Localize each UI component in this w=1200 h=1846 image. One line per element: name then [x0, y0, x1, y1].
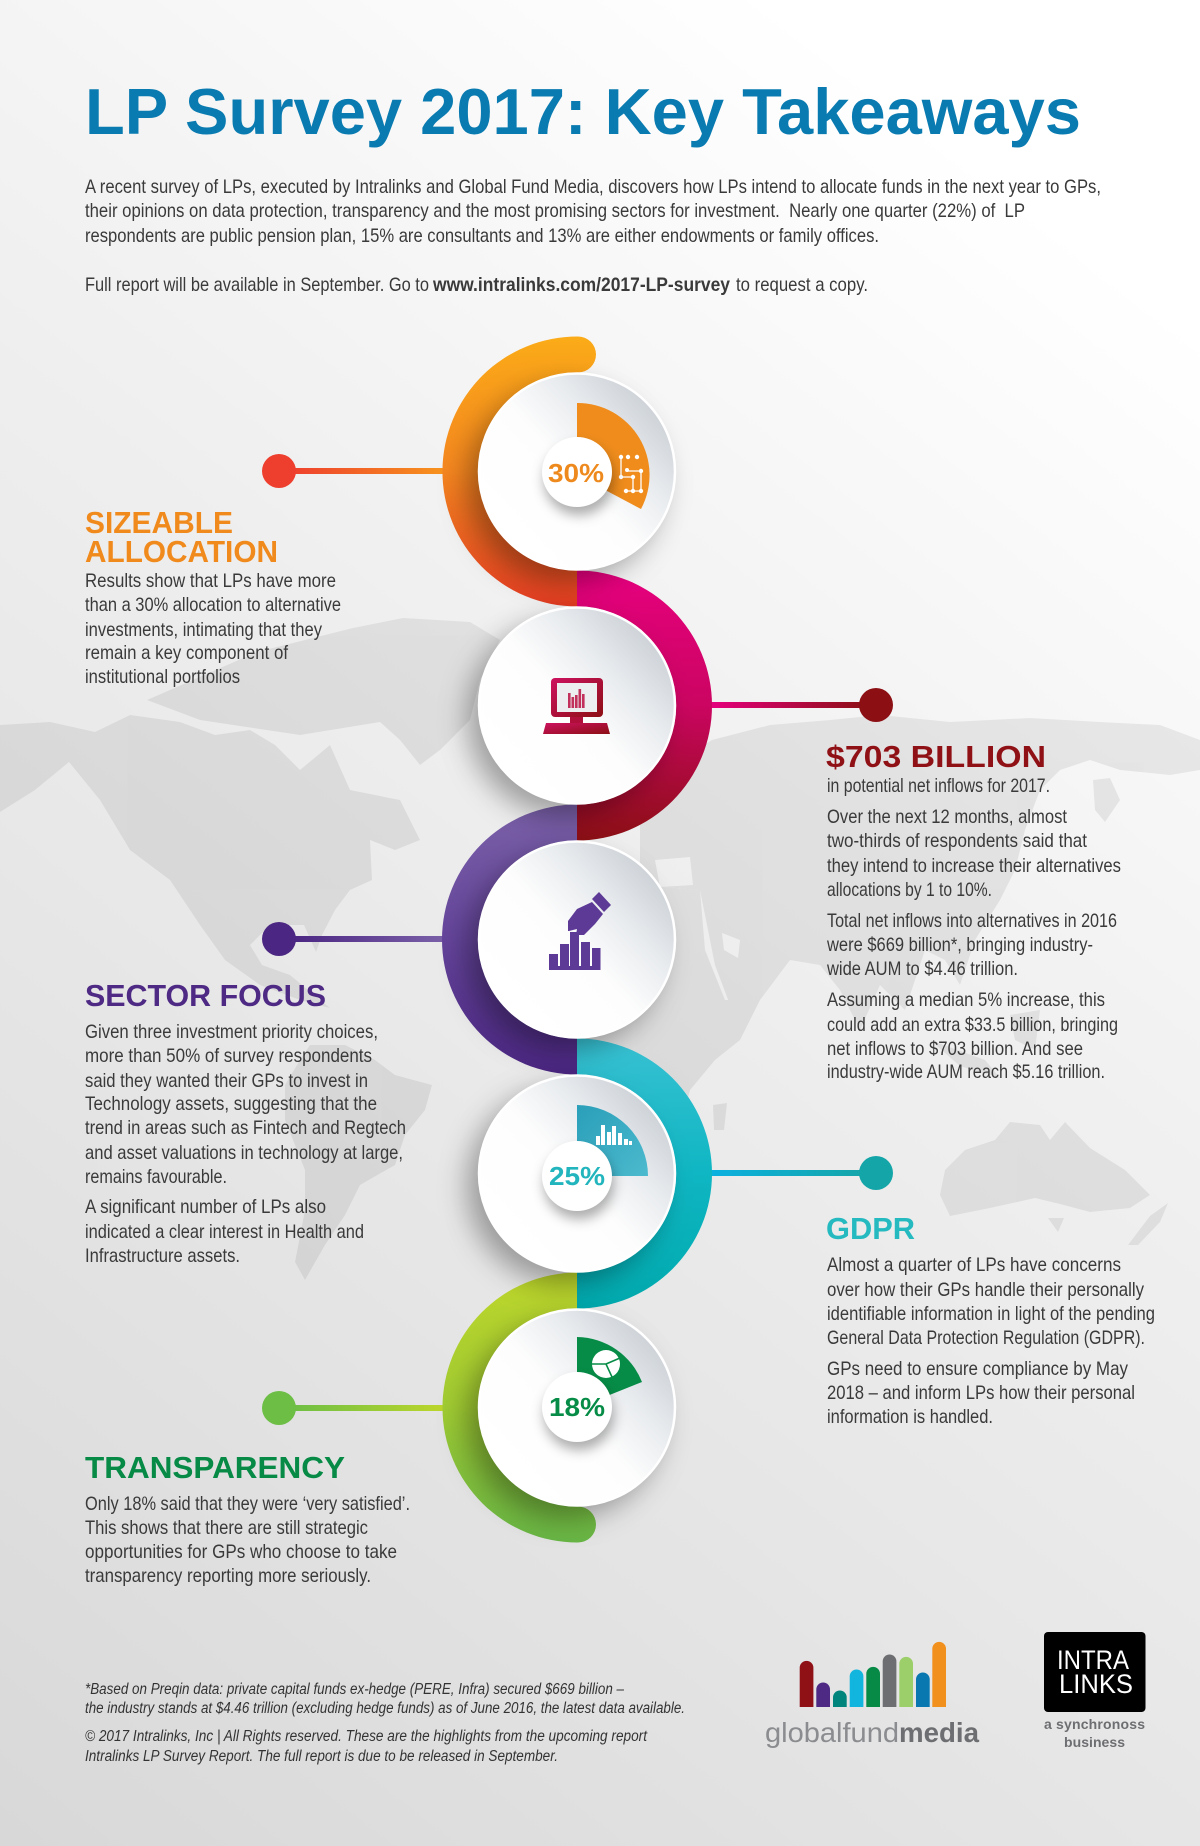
logo: intralinks: a synchronoss: [1044, 1716, 1145, 1732]
text block: gdpr: Almost a quarter of LPs have concerns: [827, 1254, 1121, 1276]
disc 5: 18%: [467, 1310, 675, 1518]
intro text: www.intralinks.com/2017-LP-survey: [432, 274, 730, 296]
icon: bar chart: [596, 1125, 632, 1145]
sector: teal 25%: [577, 1105, 648, 1176]
text block: sector focus: SECTOR FOCUS: [85, 978, 326, 1013]
world map background: [0, 618, 1200, 1280]
text block: sizeable allocation: than a 30% allocation to alternative: [85, 594, 341, 616]
icon: pie chart: [592, 1350, 620, 1378]
text block: sector focus: Technology assets, suggesting that the: [85, 1093, 377, 1115]
footnote: *Based on Preqin data: private capital funds ex-hedge (PERE, Infra) secured $669 billion –: [85, 1681, 624, 1698]
text block: 703 billion: Assuming a median 5% increase, this: [827, 989, 1105, 1011]
text block: 703 billion: [826, 739, 1121, 1083]
logo: intralinks: business: [1064, 1734, 1125, 1750]
intro text: to request a copy.: [736, 274, 868, 296]
text block: gdpr: [826, 1211, 1155, 1428]
value: 25%: 25%: [549, 1161, 605, 1191]
text block: gdpr: GPs need to ensure compliance by May: [827, 1358, 1128, 1380]
connector: sector focus: [262, 922, 444, 956]
text block: transparency: [85, 1450, 410, 1587]
text block: 703 billion: could add an extra $33.5 billion, bringing: [827, 1014, 1118, 1036]
logo: globalfundmedia: globalfund: [765, 1717, 899, 1748]
logo: intralinks: INTRA: [1057, 1645, 1129, 1675]
text block: 703 billion: they intend to increase their alternatives: [827, 855, 1121, 877]
disc 2: monitor: [467, 608, 675, 816]
footnote: the industry stands at $4.46 trillion (excluding hedge funds) as of June 2016, the latest data available.: [85, 1700, 685, 1717]
text block: sector focus: Infrastructure assets.: [85, 1245, 240, 1267]
text block: sector focus: indicated a clear interest in Health and: [85, 1221, 364, 1243]
ring: teal: [577, 1038, 712, 1308]
text block: 703 billion: net inflows to $703 billion. And see: [827, 1038, 1083, 1060]
value: 30%: 30%: [548, 458, 604, 488]
text block: gdpr: information is handled.: [827, 1406, 993, 1428]
logo: intralinks: LINKS: [1059, 1669, 1133, 1699]
icon: monitor: [543, 678, 610, 734]
intro text: their opinions on data protection, transparency and the most promising sectors for investment. Nearly one quarter (22%) of LP: [85, 200, 1025, 222]
text block: sizeable allocation: remain a key component of: [85, 642, 288, 664]
logo: globalfundmedia: [765, 1642, 979, 1748]
ring: purple: [442, 804, 577, 1074]
text block: sector focus: [85, 978, 406, 1267]
footnote: [85, 1681, 685, 1765]
text block: transparency: Only 18% said that they were ‘very satisfied’.: [85, 1493, 410, 1515]
text block: gdpr: over how their GPs handle their personally: [827, 1279, 1144, 1301]
title: LP Survey 2017: Key Takeaways: [85, 75, 1081, 148]
text block: sector focus: Given three investment priority choices,: [85, 1021, 378, 1043]
sector: orange 30%: [577, 403, 650, 509]
text block: sizeable allocation: ALLOCATION: [85, 534, 278, 569]
value: 18%: 18%: [549, 1392, 605, 1422]
disc 3: hand and bars: [467, 842, 675, 1050]
text block: 703 billion: in potential net inflows for 2017.: [827, 775, 1050, 797]
disc 1: 30% allocation: [467, 374, 675, 582]
text block: sector focus: said they wanted their GPs to invest in: [85, 1070, 368, 1092]
text block: transparency: transparency reporting more seriously.: [85, 1565, 371, 1587]
text block: transparency: TRANSPARENCY: [85, 1450, 345, 1485]
text block: 703 billion: Over the next 12 months, almost: [827, 806, 1067, 828]
text block: sector focus: more than 50% of survey respondents: [85, 1045, 372, 1067]
text block: sizeable allocation: [85, 505, 341, 688]
text block: 703 billion: were $669 billion*, bringing industry-: [826, 934, 1093, 956]
footnote: © 2017 Intralinks, Inc | All Rights reserved. These are the highlights from the upcoming report: [85, 1728, 648, 1745]
text block: sector focus: remains favourable.: [85, 1166, 227, 1188]
text block: sizeable allocation: investments, intimating that they: [85, 619, 322, 641]
text block: gdpr: GDPR: [826, 1211, 915, 1246]
intro text: respondents are public pension plan, 15% are consultants and 13% are either endowments or family offices.: [85, 225, 879, 247]
icon: hand placing bar: [549, 892, 611, 970]
ring: orange: [442, 336, 596, 606]
text block: 703 billion: wide AUM to $4.46 trillion.: [826, 958, 1018, 980]
connector: 703 billion: [710, 688, 893, 722]
text block: gdpr: 2018 – and inform LPs how their personal: [827, 1382, 1135, 1404]
text block: sizeable allocation: Results show that LPs have more: [85, 570, 336, 592]
ring: green: [442, 1272, 596, 1543]
connector: sizeable allocation: [262, 454, 444, 488]
text block: 703 billion: industry-wide AUM reach $5.16 trillion.: [827, 1061, 1105, 1083]
text block: sector focus: trend in areas such as Fintech and Regtech: [85, 1117, 406, 1139]
footnote: Intralinks LP Survey Report. The full report is due to be released in September.: [85, 1748, 558, 1765]
logo: globalfundmedia: media: [899, 1717, 979, 1748]
text block: 703 billion: $703 BILLION: [826, 739, 1046, 774]
text block: sizeable allocation: institutional portfolios: [85, 666, 240, 688]
ring: magenta: [577, 570, 712, 840]
sector: green 18%: [577, 1337, 642, 1408]
disc 4: 25%: [467, 1076, 675, 1284]
text block: sector focus: and asset valuations in technology at large,: [85, 1142, 403, 1164]
intro text: [85, 176, 1101, 296]
text block: transparency: opportunities for GPs who choose to take: [85, 1541, 397, 1563]
text block: 703 billion: two-thirds of respondents said that: [827, 830, 1087, 852]
intro text: Full report will be available in September. Go to: [85, 274, 429, 296]
text block: sizeable allocation: SIZEABLE: [85, 505, 233, 540]
text block: 703 billion: allocations by 1 to 10%.: [827, 879, 992, 901]
text block: sector focus: A significant number of LPs also: [85, 1196, 326, 1218]
text block: transparency: This shows that there are still strategic: [85, 1517, 368, 1539]
logo: intralinks: [1044, 1632, 1146, 1750]
connector: gdpr: [710, 1156, 893, 1190]
icon: circuit: [619, 455, 643, 493]
connector: transparency: [262, 1391, 444, 1425]
text block: 703 billion: Total net inflows into alternatives in 2016: [827, 910, 1117, 932]
